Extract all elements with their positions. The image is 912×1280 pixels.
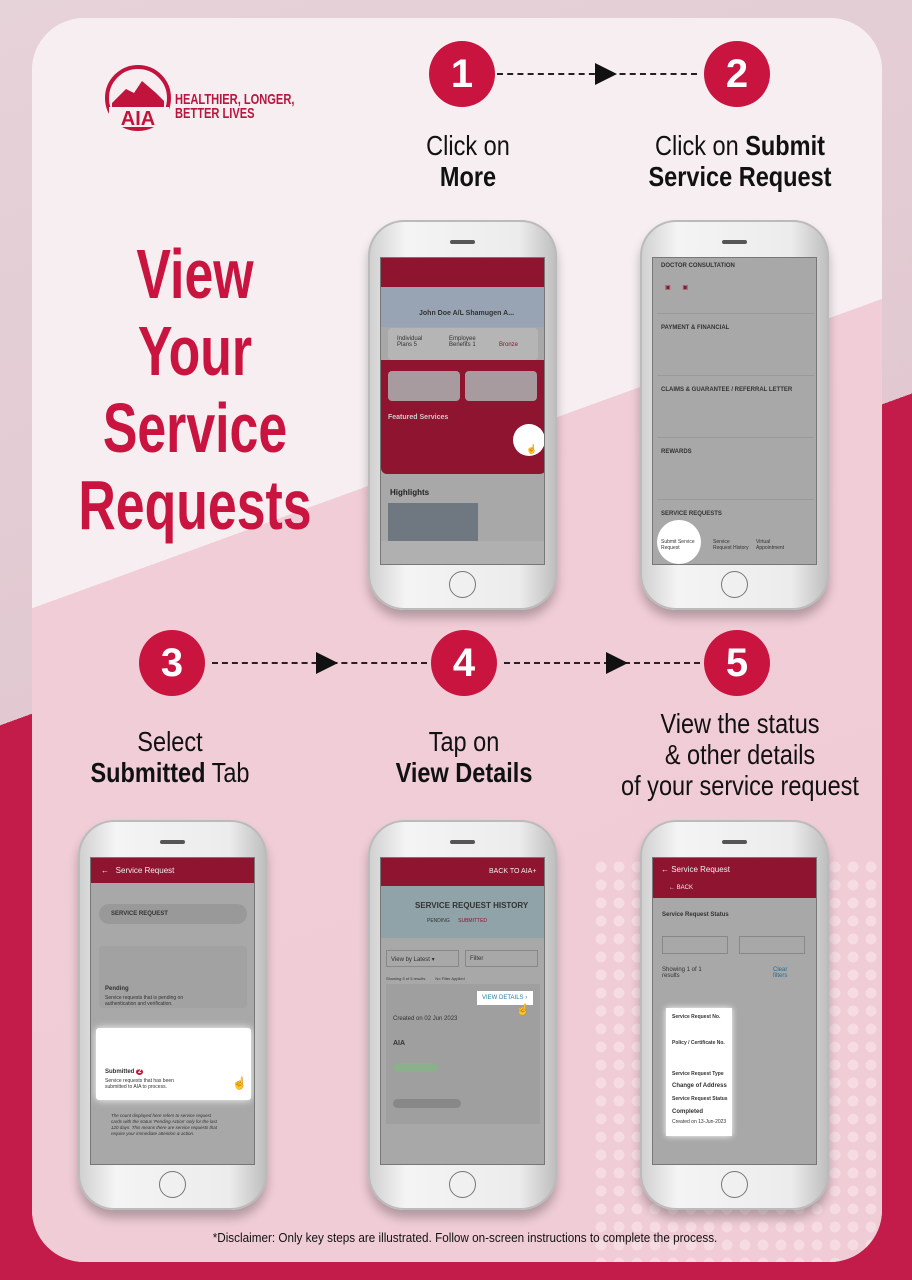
phone 1: Employee <box>449 336 476 342</box>
phone 2: Service <box>713 539 730 545</box>
phone 3: submitted to AIA to process. <box>105 1084 167 1090</box>
caption 2: Service Request <box>648 161 832 192</box>
caption 3: Select <box>137 726 203 757</box>
phone 3: Pending <box>105 986 129 992</box>
phone 1: Bronze <box>499 342 518 348</box>
step 2 circle <box>704 41 770 107</box>
title: Your <box>138 312 252 390</box>
phone 2: Request History <box>713 545 749 551</box>
caption 5 <box>621 708 859 801</box>
caption 4 <box>396 726 532 788</box>
phone 3: SERVICE REQUEST <box>111 911 168 917</box>
phone 5: Service Request Status <box>662 912 729 918</box>
phone 3: Submitted 2 <box>105 1069 141 1075</box>
title <box>78 235 312 544</box>
phone 3: authentication and verification. <box>105 1001 173 1007</box>
phone 2: CLAIMS & GUARANTEE / REFERRAL LETTER <box>661 387 792 393</box>
caption 1: More <box>440 161 496 192</box>
phone 4: ☝ <box>516 1004 530 1016</box>
phone 5: Clear <box>773 967 787 973</box>
phone 5: filters <box>773 973 787 979</box>
phone 4: PENDING SUBMITTED <box>427 918 487 924</box>
step 5 circle: 5 <box>726 641 748 685</box>
phone 3: require your immediate attention & action. <box>111 1131 194 1136</box>
phone 1: Individual <box>397 336 422 342</box>
phone 5: Service Request Type <box>672 1071 724 1077</box>
caption 5: & other details <box>665 739 815 770</box>
caption 1 <box>426 130 510 192</box>
step 4 circle: 4 <box>453 641 475 685</box>
phone 4 <box>368 820 557 1210</box>
phone 5: ← Service Request <box>661 865 730 874</box>
phone 4: Created on 02 Jun 2023 <box>393 1016 457 1022</box>
phone 1: Featured Services <box>388 414 448 421</box>
phone 3: cards with the status 'Pending Action' only for the last <box>111 1119 217 1124</box>
caption 4: Tap on <box>429 726 499 757</box>
caption 4: View Details <box>396 757 532 788</box>
logo <box>105 65 294 131</box>
phone 2: DOCTOR CONSULTATION <box>661 263 735 269</box>
dot pattern <box>592 858 882 1262</box>
phone 3: ← Service Request <box>101 866 174 875</box>
phone 5: Service Request Status <box>672 1096 728 1102</box>
caption 2 <box>648 130 832 192</box>
phone 3: Service requests that is pending on <box>105 995 183 1001</box>
phone 5 <box>640 820 829 1210</box>
phone 1 <box>368 220 557 610</box>
phone 4: Showing 5 of 5 results No Filter Applied <box>386 976 465 981</box>
phone 4: View by Latest ▾ <box>391 957 435 963</box>
step 2 circle: 2 <box>726 52 748 96</box>
phone 4: SERVICE REQUEST HISTORY <box>415 901 528 910</box>
step 1 circle: 1 <box>451 52 473 96</box>
title: Requests <box>78 466 312 544</box>
arrow 1 to 2 <box>497 63 697 85</box>
caption 3: Submitted Tab <box>90 757 250 788</box>
arrow 3 to 4 <box>212 652 427 674</box>
phone 4: VIEW DETAILS › <box>482 995 527 1001</box>
caption 3 <box>90 726 250 788</box>
logo: BETTER LIVES <box>175 105 255 122</box>
phone 2: Virtual <box>756 539 770 545</box>
phone 5: Created on 13-Jun-2023 <box>672 1119 726 1125</box>
phone 1: John Doe A/L Shamugen A... <box>419 310 514 317</box>
phone 3 <box>78 820 267 1210</box>
caption 2: Click on Submit <box>655 130 825 161</box>
arrow 4 to 5 <box>504 652 700 674</box>
phone 4: AIA <box>393 1040 405 1047</box>
phone 5: Policy / Certificate No. <box>672 1040 725 1046</box>
phone 3: The count displayed here refers to service request <box>111 1113 211 1118</box>
caption 5: of your service request <box>621 770 859 801</box>
phone 5: Showing 1 of 1 <box>662 967 702 973</box>
step 3 circle <box>139 630 205 696</box>
phone 1: Plans 5 <box>397 342 417 348</box>
title: Service <box>103 389 287 467</box>
phone 5: ← BACK <box>669 885 693 891</box>
phone 2: Request <box>661 545 680 551</box>
phone 2: SERVICE REQUESTS <box>661 511 722 517</box>
phone 3: Service requests that has been <box>105 1078 174 1084</box>
logo: AIA <box>121 108 155 130</box>
step 5 circle <box>704 630 770 696</box>
phone 2: PAYMENT & FINANCIAL <box>661 325 729 331</box>
phone 5: Change of Address <box>672 1083 727 1089</box>
phone 2 <box>640 220 829 610</box>
phone 2: Appointment <box>756 545 784 551</box>
phone 1: Benefits 1 <box>449 342 476 348</box>
caption 5: View the status <box>660 708 820 739</box>
phone 1: Highlights <box>390 488 429 497</box>
step 4 circle <box>431 630 497 696</box>
phone 5: results <box>662 973 680 979</box>
phone 2: ▣ ▣ <box>665 285 688 291</box>
step 1 circle <box>429 41 495 107</box>
phone 5: Service Request No. <box>672 1014 720 1020</box>
phone 4: Filter <box>470 956 483 962</box>
phone 4: BACK TO AIA+ <box>489 868 536 875</box>
caption 1: Click on <box>426 130 510 161</box>
phone 3: 120 days. This means there are service requests that <box>111 1125 217 1130</box>
phone 1: ☝ <box>526 444 537 454</box>
phone 2: Submit Service <box>661 539 695 545</box>
logo: HEALTHIER, LONGER, <box>175 91 294 108</box>
phone 5: Completed <box>672 1109 703 1115</box>
phone 2: REWARDS <box>661 449 692 455</box>
step 3 circle: 3 <box>161 641 183 685</box>
phone 3: ☝ <box>232 1076 247 1090</box>
disclaimer: *Disclaimer: Only key steps are illustrated. Follow on-screen instructions to complete the process. <box>213 1230 717 1245</box>
title: View <box>136 235 254 313</box>
